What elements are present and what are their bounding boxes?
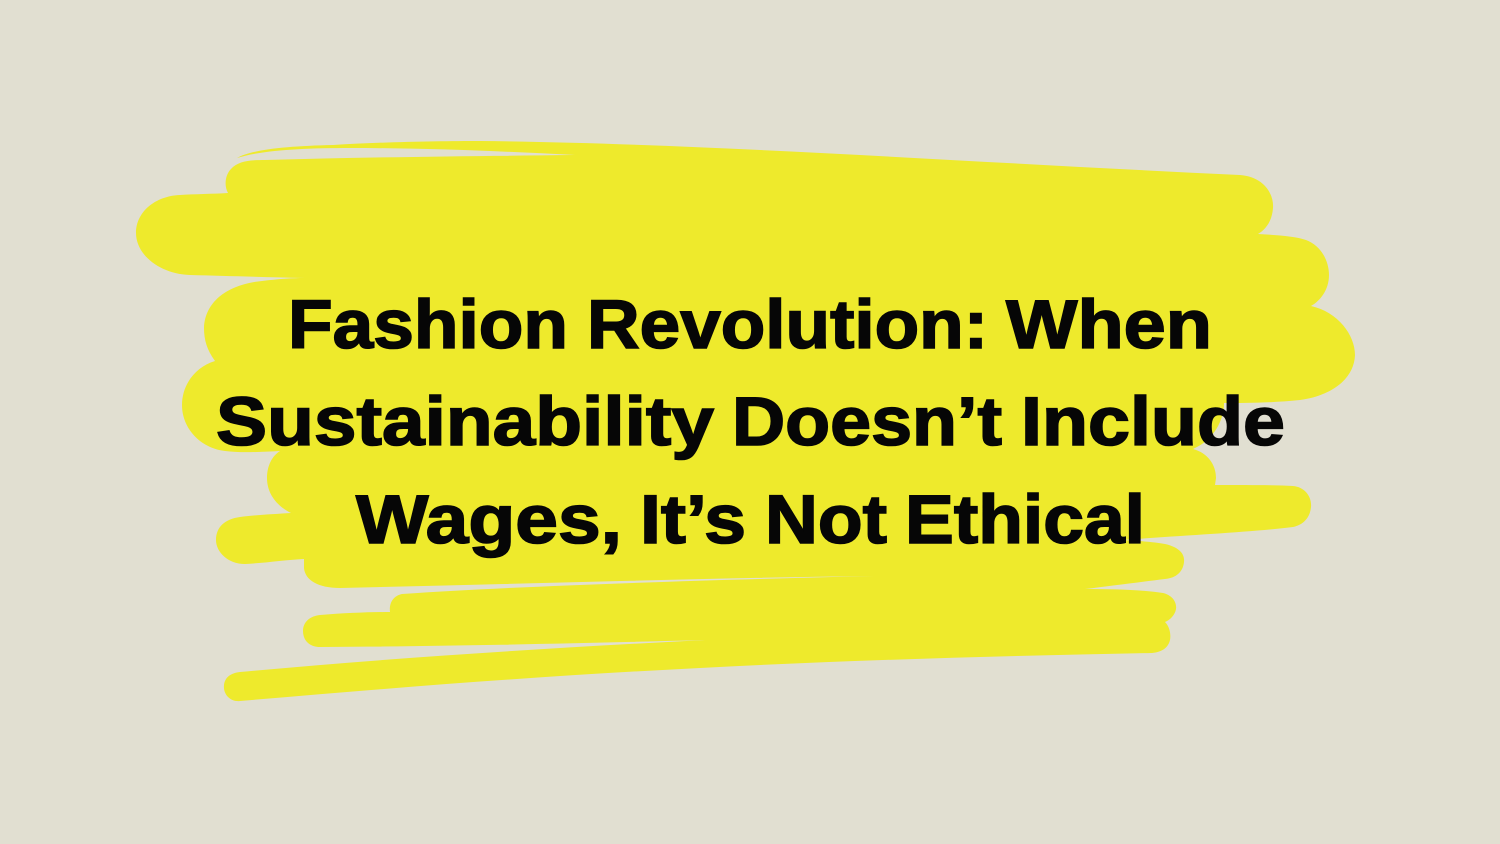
title: Ethical	[905, 481, 1145, 558]
title	[216, 286, 1285, 558]
title: Wages,	[356, 481, 622, 558]
title: Revolution:	[587, 286, 988, 363]
title: Sustainability	[216, 383, 714, 460]
title: Not	[765, 481, 887, 558]
title: When	[1006, 286, 1212, 363]
title: Include	[1021, 383, 1285, 460]
title: Fashion	[288, 286, 568, 363]
title: It’s	[640, 481, 746, 558]
title: Doesn’t	[732, 383, 1002, 460]
yellow scribble highlight	[136, 141, 1355, 701]
